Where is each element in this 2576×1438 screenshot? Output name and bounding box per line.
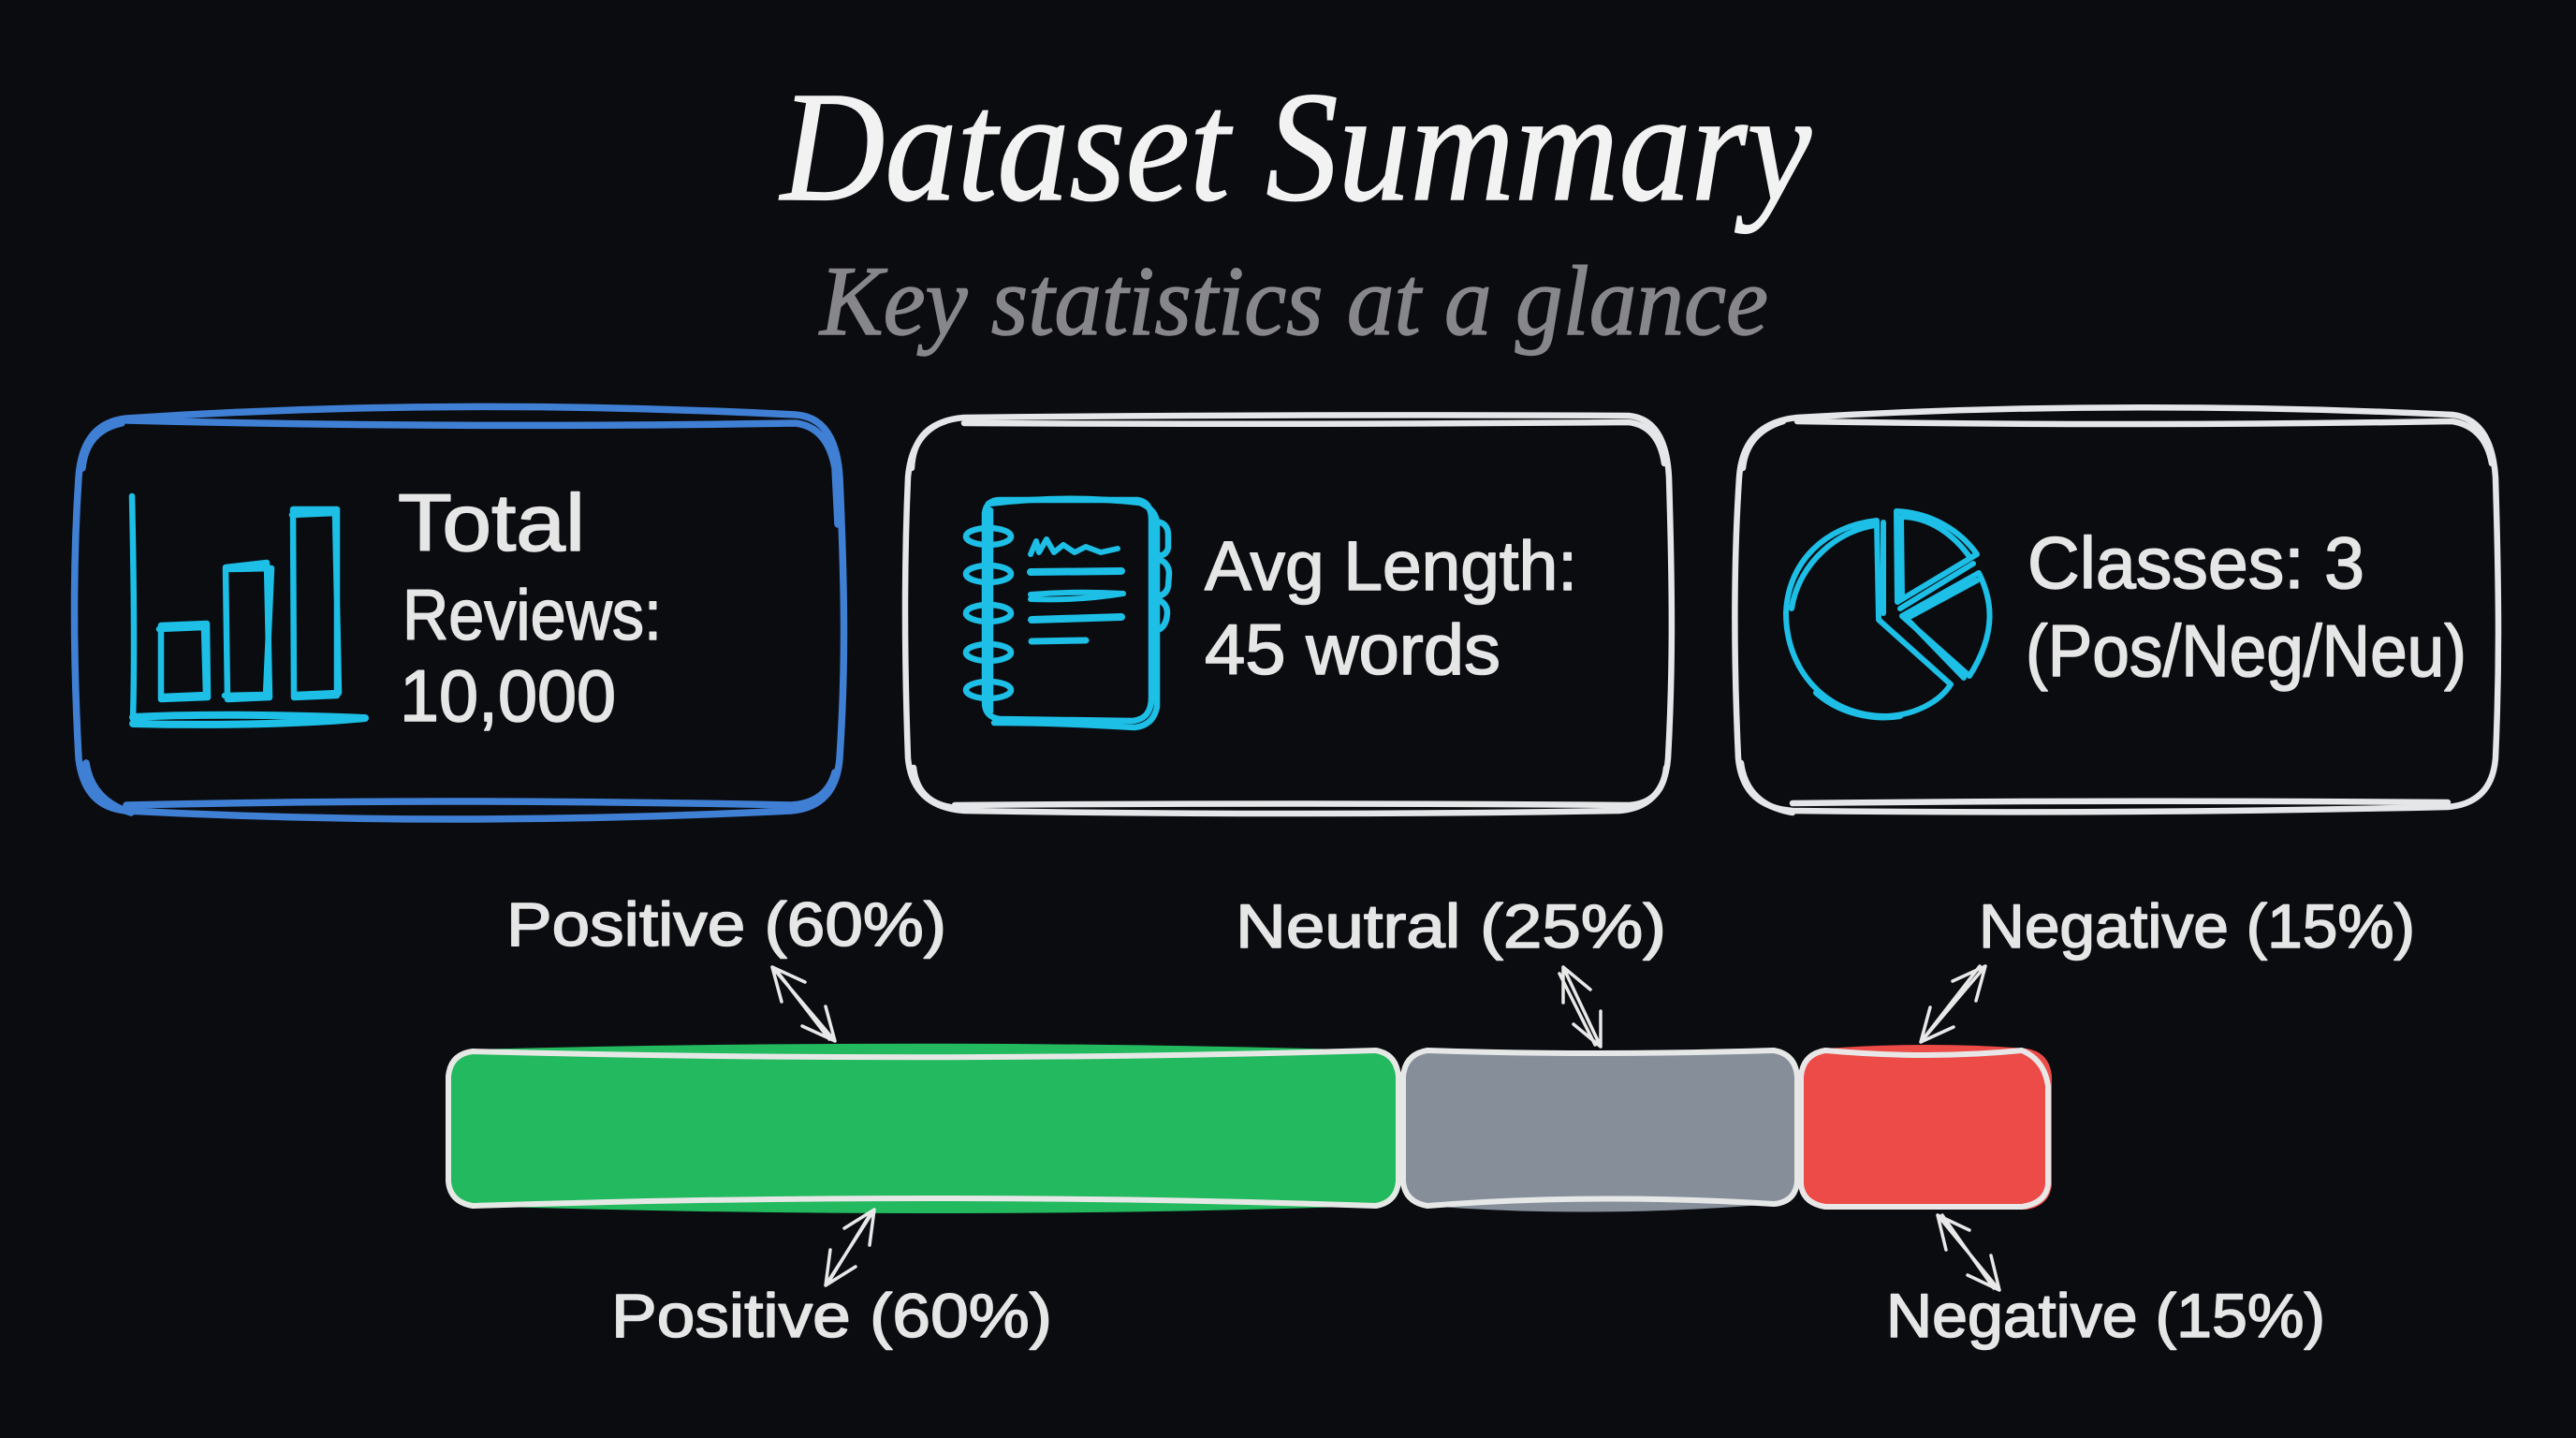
icon: notebook — [966, 499, 1169, 727]
panel outline: white sketch border — [1734, 407, 2498, 813]
panel: average length — [905, 415, 1672, 814]
panel outline: blue sketch border — [75, 406, 844, 819]
stat text: average length — [1205, 527, 1577, 690]
stat text: total reviews — [398, 478, 662, 737]
arrow: negative bottom — [1938, 1215, 1999, 1290]
label: positive top: Positive (60%) — [506, 889, 946, 959]
arrow: negative top — [1921, 966, 1985, 1042]
arrow: neutral top — [1559, 967, 1601, 1047]
stat text: average length: 45 words — [1205, 610, 1500, 690]
arrow: positive top — [772, 967, 835, 1041]
arrow: positive bottom — [826, 1210, 874, 1285]
stat text: average length: Avg Length: — [1205, 527, 1577, 605]
icon: bar chart — [132, 496, 365, 725]
label: neutral top: Neutral (25%) — [1236, 891, 1666, 961]
label: negative top: Negative (15%) — [1979, 891, 2415, 961]
stat text: classes: (Pos/Neg/Neu) — [2026, 609, 2466, 692]
bar segment: negative 15% — [1801, 1045, 2052, 1210]
title: Dataset Summary — [779, 60, 1811, 234]
stat text: total reviews: Total — [398, 478, 585, 568]
bar segment: neutral 25% — [1403, 1050, 1797, 1212]
stat text: total reviews: Reviews: — [402, 576, 662, 655]
panel outline: white sketch border — [905, 415, 1672, 814]
label: negative bottom: Negative (15%) — [1886, 1281, 2325, 1350]
icon: pie chart — [1786, 511, 1990, 717]
stat text: classes — [2026, 521, 2466, 692]
stat text: classes: Classes: 3 — [2027, 521, 2364, 604]
panel: classes — [1734, 407, 2498, 813]
subtitle: Key statistics at a glance — [818, 246, 1768, 356]
panel: total reviews — [75, 406, 844, 819]
chart: sentiment distribution stacked bar — [447, 1044, 2052, 1213]
bar segment: positive 60% — [447, 1044, 1398, 1213]
label: positive bottom: Positive (60%) — [611, 1281, 1052, 1350]
stat text: total reviews: 10,000 — [400, 654, 616, 737]
